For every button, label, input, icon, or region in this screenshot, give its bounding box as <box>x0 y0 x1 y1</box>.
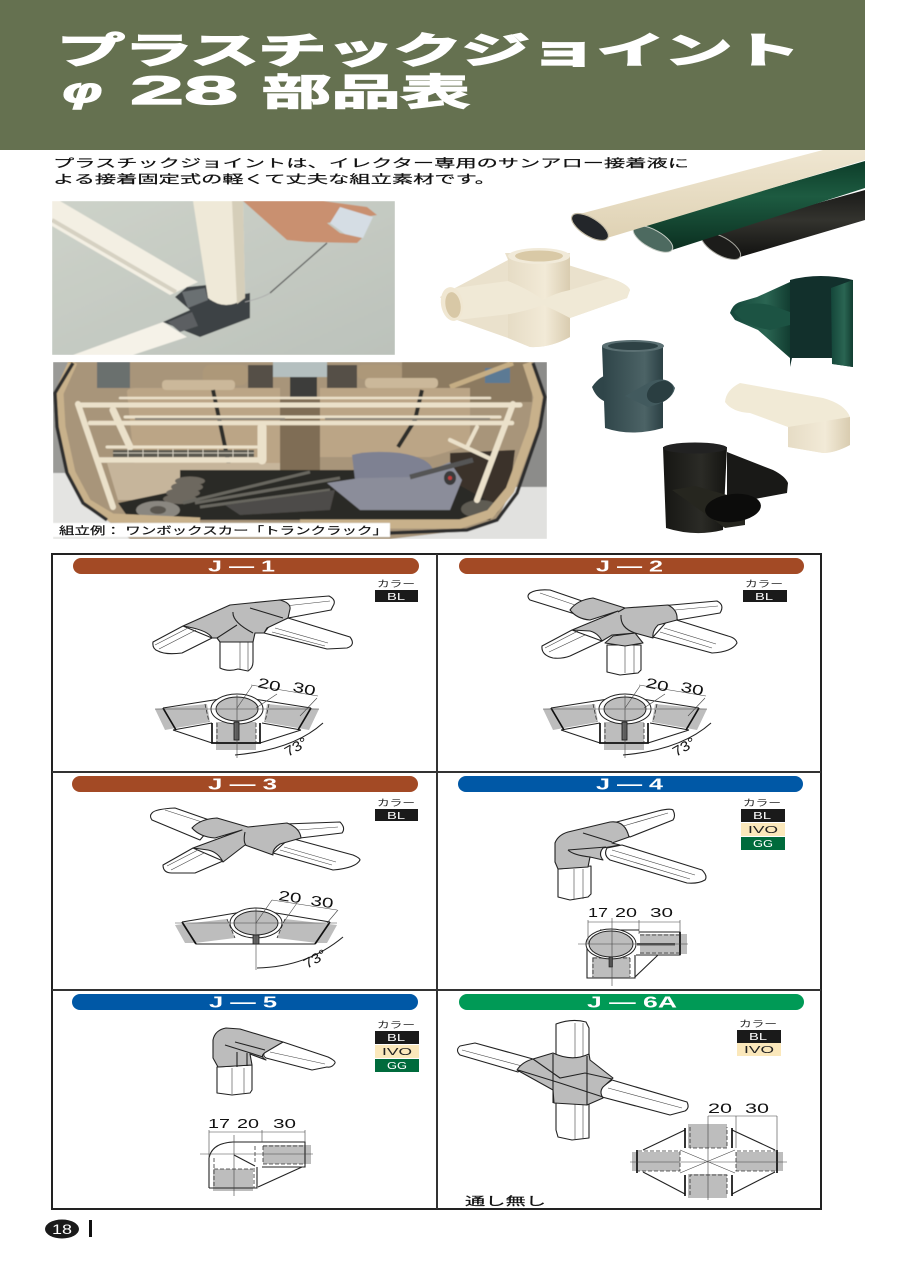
cream rack frame <box>78 398 520 507</box>
color chips J-3: BL <box>387 811 406 822</box>
dimensions J-4: 17 <box>588 906 608 920</box>
color chips J-4 <box>741 798 785 850</box>
dimensions J-2 <box>644 674 706 760</box>
joint illustration J-1 <box>153 596 352 671</box>
color chips J-5: GG <box>387 1061 407 1072</box>
panel: J-6A <box>458 994 804 1208</box>
car interior seats <box>97 362 532 470</box>
plan drawing J-1 <box>155 685 323 758</box>
color chips J-4: GG <box>753 839 773 850</box>
color chips J-4: カラー <box>743 798 781 808</box>
plan drawing J-5 <box>200 1130 313 1196</box>
dimensions J-3: 73° <box>300 946 329 972</box>
product photo: black joint <box>663 442 788 533</box>
dimensions J-4 <box>588 906 673 920</box>
intro text: よる接着固定式の軽くて丈夫な組立素材です。 <box>53 172 496 186</box>
dimensions J-5: 30 <box>273 1117 296 1131</box>
heading J-6A <box>459 994 804 1012</box>
heading J-4: J — 4 <box>596 776 663 794</box>
title line 2: φ <box>63 72 102 110</box>
page number <box>45 1220 92 1238</box>
dimensions J-3: 30 <box>310 892 335 911</box>
dimensions J-2: 30 <box>679 678 706 699</box>
joint illustration J-3 <box>150 808 360 873</box>
color chips J-5: カラー <box>377 1020 415 1030</box>
heading J-5: J — 5 <box>209 994 277 1012</box>
joint illustration J-5 <box>213 1028 335 1095</box>
plan drawing J-6A <box>630 1116 787 1200</box>
joint illustration J-6A <box>458 1020 688 1140</box>
caption strip <box>53 523 390 537</box>
color chips J-4: BL <box>753 811 772 822</box>
color chips J-5: BL <box>387 1033 406 1044</box>
color chips J-3: カラー <box>377 798 415 808</box>
color chips J-1 <box>375 579 418 603</box>
heading J-5 <box>72 994 418 1012</box>
color chips J-6A: カラー <box>739 1019 777 1029</box>
heading J-3 <box>72 776 418 794</box>
heading J-2 <box>459 558 804 576</box>
dimensions J-4: 30 <box>650 906 673 920</box>
color chips J-1: BL <box>387 592 406 603</box>
dimensions J-1: 20 <box>256 674 283 695</box>
joint illustration J-2 <box>528 590 737 675</box>
product photo: pipes <box>567 150 865 265</box>
color chips J-6A: IVO <box>744 1045 774 1056</box>
product photo: green half joint <box>730 276 853 367</box>
heading J-4 <box>458 776 803 794</box>
dimensions J-1 <box>256 674 318 760</box>
color chips J-2: BL <box>755 592 774 603</box>
header banner <box>0 0 865 150</box>
photo: trunk rack assembly example <box>53 362 547 539</box>
photo caption: 組立例： ワンボックスカー「トランクラック」 <box>59 524 388 537</box>
title line 2 <box>63 69 470 113</box>
title line 2: 28 <box>130 69 238 113</box>
color chips J-6A <box>737 1019 781 1056</box>
dimensions J-5 <box>208 1117 296 1131</box>
color chips J-6A: BL <box>749 1032 768 1043</box>
heading J-3: J — 3 <box>208 776 277 794</box>
color chips J-1: カラー <box>377 579 415 589</box>
dimensions J-6A: 30 <box>745 1100 769 1116</box>
color chips J-2 <box>743 579 787 603</box>
car door frame <box>53 362 547 539</box>
heading J-1 <box>73 558 419 576</box>
product photo: cream elbow joint <box>725 383 850 453</box>
product photo: cream cross joint <box>438 248 630 347</box>
color chips J-5: IVO <box>382 1047 412 1058</box>
color chips J-5 <box>375 1020 419 1072</box>
joint illustration J-4 <box>555 809 706 900</box>
dimensions J-4: 20 <box>615 906 637 920</box>
title line 1: プラスチックジョイント <box>57 30 800 71</box>
panel: J-4 <box>458 776 803 986</box>
heading J-6A: J — 6A <box>587 994 678 1012</box>
title line 2: 部品表 <box>262 72 470 113</box>
dimensions J-1: 30 <box>291 678 318 699</box>
panel: J-1 <box>73 558 419 760</box>
dimensions J-3: 20 <box>278 887 303 906</box>
page number: 18 <box>52 1221 72 1237</box>
dimensions J-6A: 20 <box>708 1100 732 1116</box>
intro text <box>53 156 689 186</box>
panel: J-5 <box>72 994 419 1196</box>
plan drawing J-3 <box>175 900 343 970</box>
heading J-2: J — 2 <box>596 558 663 576</box>
plan drawing J-4 <box>578 918 688 986</box>
product photo: dark teal joint <box>592 340 677 432</box>
plan drawing J-2 <box>543 685 711 758</box>
intro text: プラスチックジョイントは、イレクター専用のサンアロー接着液に <box>53 156 689 170</box>
dimensions J-5: 20 <box>237 1117 259 1131</box>
dimensions J-2: 73° <box>670 734 698 760</box>
dimensions J-2: 20 <box>644 674 671 695</box>
dimensions J-3 <box>278 887 335 972</box>
note: no through-hole: 通し無し <box>465 1194 546 1208</box>
panel: J-3 <box>72 776 418 972</box>
color chips J-3 <box>375 798 418 822</box>
photo: applying adhesive to joint <box>52 201 395 355</box>
panel: J-2 <box>459 558 804 760</box>
dimensions J-5: 17 <box>208 1117 230 1131</box>
color chips J-4: IVO <box>748 825 778 836</box>
color chips J-2: カラー <box>745 579 783 589</box>
parts table frame <box>52 554 821 1209</box>
heading J-1: J — 1 <box>208 558 275 576</box>
trunk floor and stroller <box>107 450 515 520</box>
dimensions J-1: 73° <box>282 734 310 760</box>
dimensions J-6A <box>708 1100 769 1116</box>
